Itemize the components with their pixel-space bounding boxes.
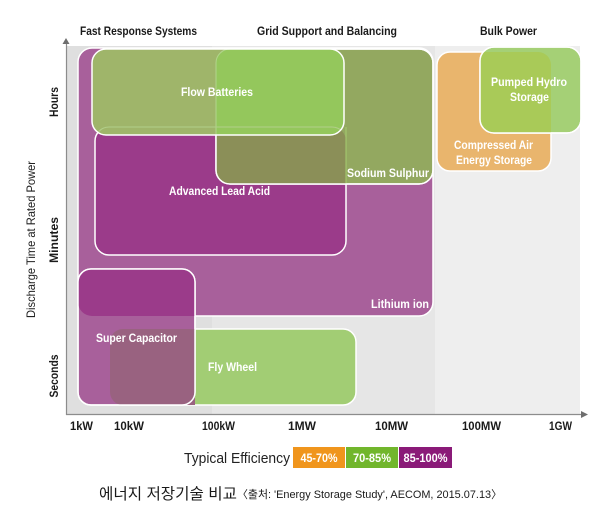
x axis labels: 100kW xyxy=(202,419,236,433)
legend: 45-70% xyxy=(293,447,345,468)
label: Flow Batteries: Flow Batteries xyxy=(181,85,253,99)
x axis labels: 1kW xyxy=(70,419,94,433)
region: Fly Wheel xyxy=(110,329,356,405)
x axis labels: 10kW xyxy=(114,419,145,433)
region: Super Capacitor xyxy=(78,269,195,405)
region: Advanced Lead Acid xyxy=(95,127,346,255)
caption: 에너지 저장기술 비교 xyxy=(99,485,237,503)
label: Pumped Hydro: Pumped Hydro xyxy=(491,75,567,89)
x axis arrow xyxy=(66,411,588,418)
region: Sodium Sulphur xyxy=(215,48,434,185)
label: Compressed Air: Compressed Air xyxy=(454,138,533,152)
y label: Hours: Hours xyxy=(47,87,61,117)
legend: 85-100%: 85-100% xyxy=(404,451,448,465)
x axis labels: 100MW xyxy=(462,419,502,433)
column heading: Grid Support and Balancing: Grid Support and Balancing xyxy=(257,24,397,38)
label: Energy Storage: Energy Storage xyxy=(456,153,532,167)
x axis labels: 10MW xyxy=(375,419,409,433)
column heading: Fast Response Systems: Fast Response Systems xyxy=(80,24,197,38)
legend: 70-85%: 70-85% xyxy=(353,451,391,465)
legend: 70-85% xyxy=(346,447,398,468)
column heading: Bulk Power: Bulk Power xyxy=(480,24,537,38)
y label: Seconds: Seconds xyxy=(47,354,61,398)
region: Compressed Air Energy Storage xyxy=(437,52,551,171)
legend title: Typical Efficiency xyxy=(184,450,290,467)
region: Pumped Hydro Storage xyxy=(479,46,580,134)
y axis title: Discharge Time at Rated Power xyxy=(24,161,38,318)
chart background bands xyxy=(67,46,580,414)
label: Storage: Storage xyxy=(510,90,549,104)
caption xyxy=(99,485,502,503)
label: Advanced Lead Acid: Advanced Lead Acid xyxy=(169,184,270,198)
legend: 85-100% xyxy=(399,447,452,468)
region: Flow Batteries xyxy=(91,48,345,136)
legend: 45-70%: 45-70% xyxy=(300,451,338,465)
y label: Minutes: Minutes xyxy=(47,217,61,263)
x axis labels xyxy=(70,419,573,433)
label: Fly Wheel: Fly Wheel xyxy=(208,360,257,374)
x axis labels: 1GW xyxy=(549,419,573,433)
y axis arrow xyxy=(62,38,70,415)
x axis labels: 1MW xyxy=(288,419,317,433)
caption: 〈출처: 'Energy Storage Study', AECOM, 2015.07.13〉 xyxy=(237,488,502,501)
label: Super Capacitor: Super Capacitor xyxy=(96,331,177,345)
label: Sodium Sulphur: Sodium Sulphur xyxy=(347,166,429,180)
label: Lithium ion: Lithium ion xyxy=(371,297,429,311)
